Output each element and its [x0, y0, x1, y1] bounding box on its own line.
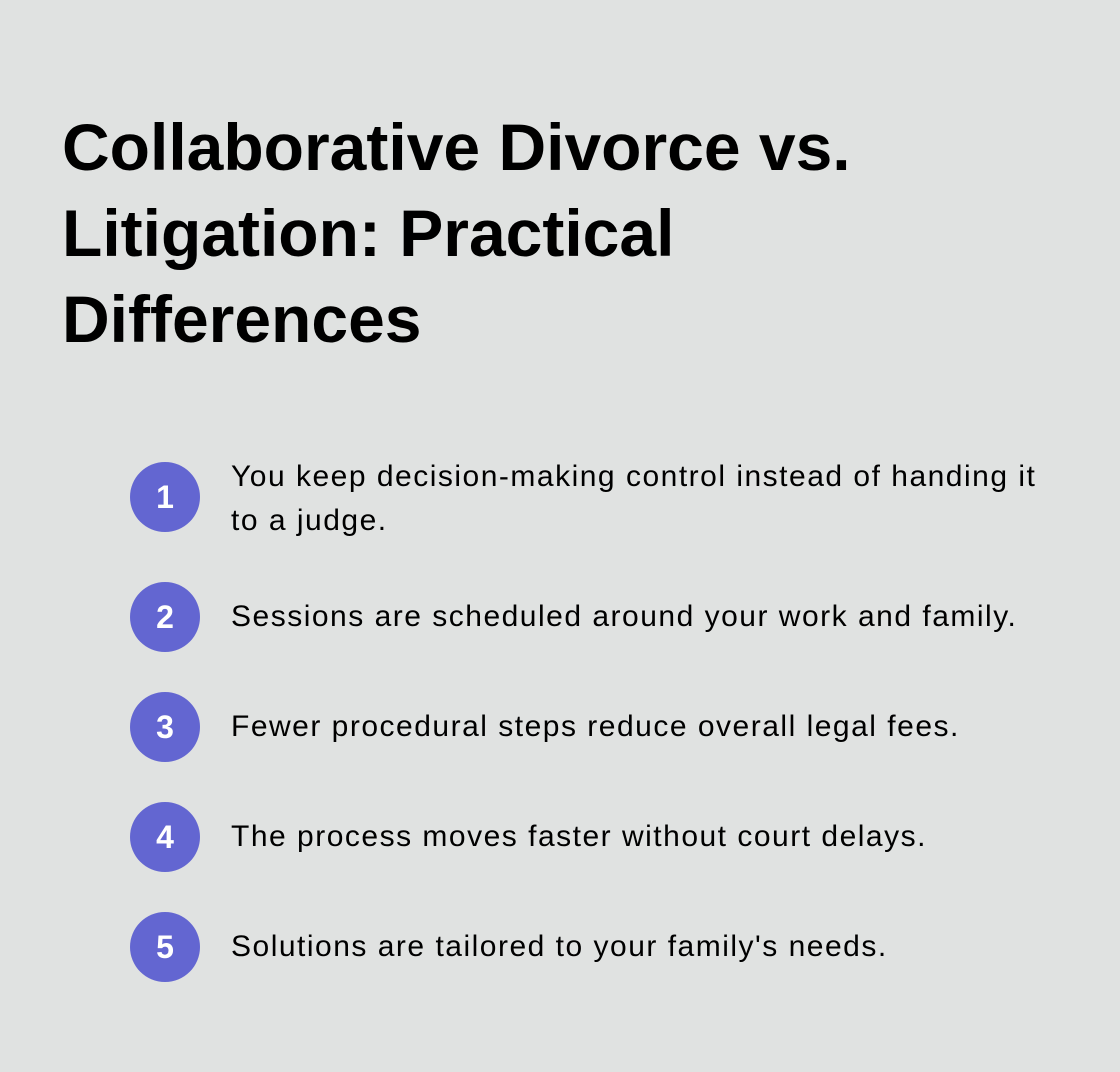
title: Litigation: Practical — [62, 196, 674, 270]
text 1: You keep decision-making control instead of handing it — [231, 460, 1036, 493]
title: Collaborative Divorce vs. — [62, 110, 851, 184]
circle 2 — [130, 582, 200, 652]
text 3: Fewer procedural steps reduce overall legal fees. — [231, 710, 960, 743]
text 2: Sessions are scheduled around your work and family. — [231, 600, 1017, 633]
text 4: The process moves faster without court delays. — [231, 820, 927, 853]
title: Differences — [62, 282, 422, 356]
item 3 — [130, 692, 960, 762]
circle 1 — [130, 462, 200, 532]
item 4 — [130, 802, 927, 872]
circle 4: 4 — [156, 819, 174, 855]
item 5 — [130, 912, 888, 982]
circle 1: 1 — [156, 479, 174, 515]
text 5: Solutions are tailored to your family's needs. — [231, 930, 888, 963]
item 2 — [130, 582, 1017, 652]
circle 4 — [130, 802, 200, 872]
text 1: to a judge. — [231, 504, 388, 537]
circle 5: 5 — [156, 929, 174, 965]
circle 3 — [130, 692, 200, 762]
text 1 — [231, 460, 1036, 537]
title — [62, 110, 851, 356]
circle 5 — [130, 912, 200, 982]
circle 2: 2 — [156, 599, 174, 635]
circle 3: 3 — [156, 709, 174, 745]
item 1 — [130, 460, 1036, 537]
